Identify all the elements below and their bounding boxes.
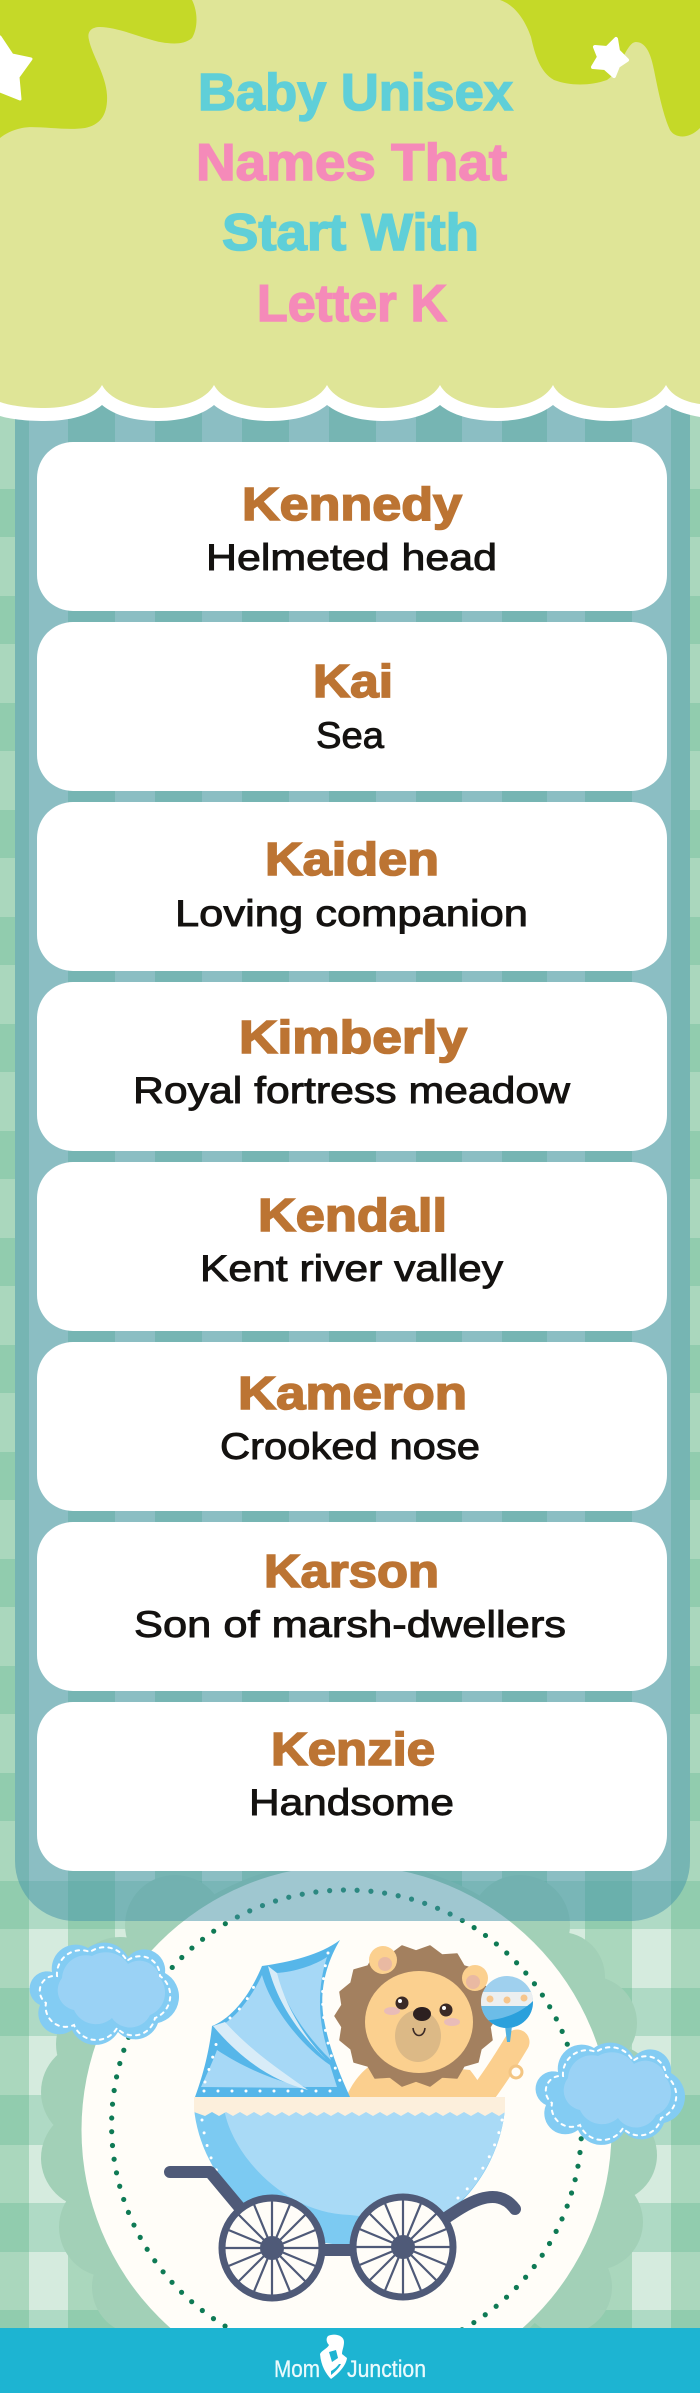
meaning: Helmeted head (206, 537, 497, 578)
right star (593, 39, 627, 76)
meaning: Loving companion (175, 893, 528, 934)
teal list panel (15, 300, 690, 1921)
canopy (195, 1940, 350, 2097)
name: Kaiden (265, 833, 439, 885)
meaning: Sea (316, 715, 384, 756)
meaning: Crooked nose (220, 1426, 480, 1467)
name: Kenzie (271, 1723, 435, 1775)
dotted ring (112, 1890, 582, 2360)
header banner (0, 0, 700, 421)
title: Letter K (257, 275, 447, 333)
top right green blob (500, 0, 700, 136)
card: Kennedy (37, 442, 667, 611)
card: Kai (37, 622, 667, 791)
name: Kendall (258, 1189, 447, 1241)
meaning: Royal fortress meadow (133, 1070, 570, 1111)
bassinet body (194, 2097, 505, 2245)
title: Start With (222, 204, 479, 262)
title: Names That (196, 134, 507, 192)
right wheel (353, 2197, 453, 2297)
card: Kendall (37, 1162, 667, 1331)
left star (0, 33, 31, 99)
meaning: Son of marsh-dwellers (134, 1604, 566, 1645)
card: Kaiden (37, 802, 667, 971)
footer bar: Junction (347, 2356, 426, 2383)
title: Baby Unisex (198, 64, 513, 122)
white circle badge (82, 1871, 612, 2328)
name: Kimberly (239, 1011, 467, 1063)
top left green blob (0, 0, 196, 138)
lion (335, 1946, 522, 2100)
meaning: Kent river valley (200, 1248, 504, 1289)
name: Kennedy (242, 478, 462, 530)
name: Kameron (238, 1367, 467, 1419)
right cloud (536, 2043, 685, 2145)
logo text: Mom (274, 2356, 320, 2383)
rattle (480, 1976, 534, 2042)
card: Kimberly (37, 982, 667, 1151)
scalloped green badge behind circle (41, 1871, 657, 2328)
name: Karson (264, 1545, 439, 1597)
left cloud (30, 1943, 179, 2045)
logo mark (320, 2335, 347, 2379)
meaning: Handsome (249, 1782, 454, 1823)
title (196, 64, 513, 333)
footer bar (0, 2328, 700, 2393)
card: Karson (37, 1522, 667, 1691)
handles and axle (170, 2172, 515, 2250)
name: Kai (313, 655, 393, 707)
stroller with lion (170, 1940, 534, 2298)
left wheel (222, 2198, 322, 2298)
card: Kameron (37, 1342, 667, 1511)
card: Kenzie (37, 1702, 667, 1871)
